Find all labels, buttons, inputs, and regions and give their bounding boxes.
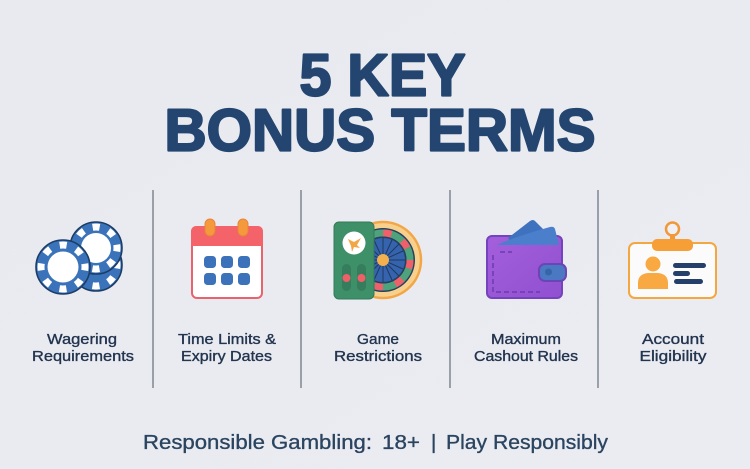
label: maximum cashout rules: Cashout Rules [474, 348, 578, 365]
footer: responsible gambling note [143, 431, 609, 454]
label: wagering requirements: Requirements [32, 348, 134, 365]
title [164, 42, 596, 164]
label: time limits and expiry dates: Time Limits & [178, 331, 276, 348]
icon: game card and roulette wheel [334, 222, 421, 299]
footer: responsible gambling note: 18+ [382, 431, 420, 454]
label: game restrictions: Restrictions [334, 348, 422, 365]
icon: wallet [487, 220, 566, 298]
label: time limits and expiry dates [178, 331, 276, 365]
footer: responsible gambling note: Responsible Gambling: [143, 431, 372, 454]
label: maximum cashout rules [474, 331, 578, 365]
label: time limits and expiry dates: Expiry Dates [181, 348, 272, 365]
label: account eligibility [640, 331, 707, 365]
label: game restrictions [334, 331, 422, 365]
label: maximum cashout rules: Maximum [491, 331, 561, 348]
label: account eligibility: Account [642, 331, 705, 348]
footer: responsible gambling note: | [431, 431, 436, 454]
label: game restrictions: Game [357, 331, 399, 348]
title: 5 KEY [300, 42, 466, 108]
label: wagering requirements: Wagering [47, 331, 117, 348]
title: BONUS TERMS [164, 98, 596, 164]
footer: responsible gambling note: Play Responsibly [446, 431, 609, 454]
icon: id badge [629, 222, 716, 298]
icon: casino chips [36, 222, 122, 294]
icon: calendar [191, 219, 263, 298]
label: wagering requirements [32, 331, 134, 365]
label: account eligibility: Eligibility [640, 348, 707, 365]
